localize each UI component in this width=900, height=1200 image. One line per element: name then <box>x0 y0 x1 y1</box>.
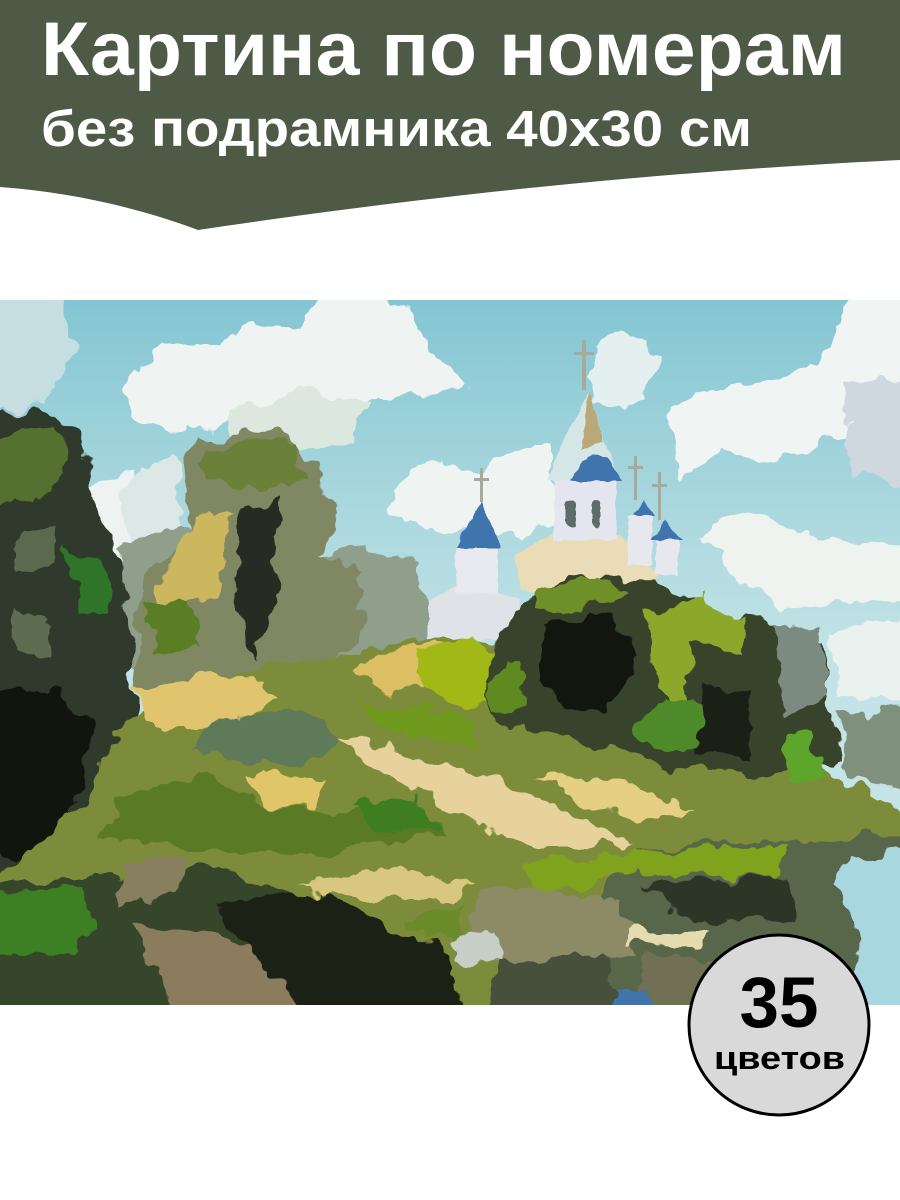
right trees <box>485 575 845 790</box>
badge: 35 colours <box>689 935 869 1115</box>
badge label: цветов <box>714 1040 845 1076</box>
title: Картина по номерам <box>41 7 846 92</box>
left trees <box>0 406 368 873</box>
painting: church landscape <box>0 290 900 1045</box>
subtitle: без подрамника 40х30 см <box>41 100 752 157</box>
hill and meadow <box>0 635 900 1045</box>
sky <box>0 300 900 812</box>
badge number: 35 <box>740 964 818 1043</box>
header banner <box>0 0 900 230</box>
church <box>428 390 682 640</box>
river and foreground <box>0 828 900 1005</box>
church crosses <box>474 340 667 520</box>
clouds <box>0 290 900 710</box>
distant grey trees <box>120 525 900 800</box>
